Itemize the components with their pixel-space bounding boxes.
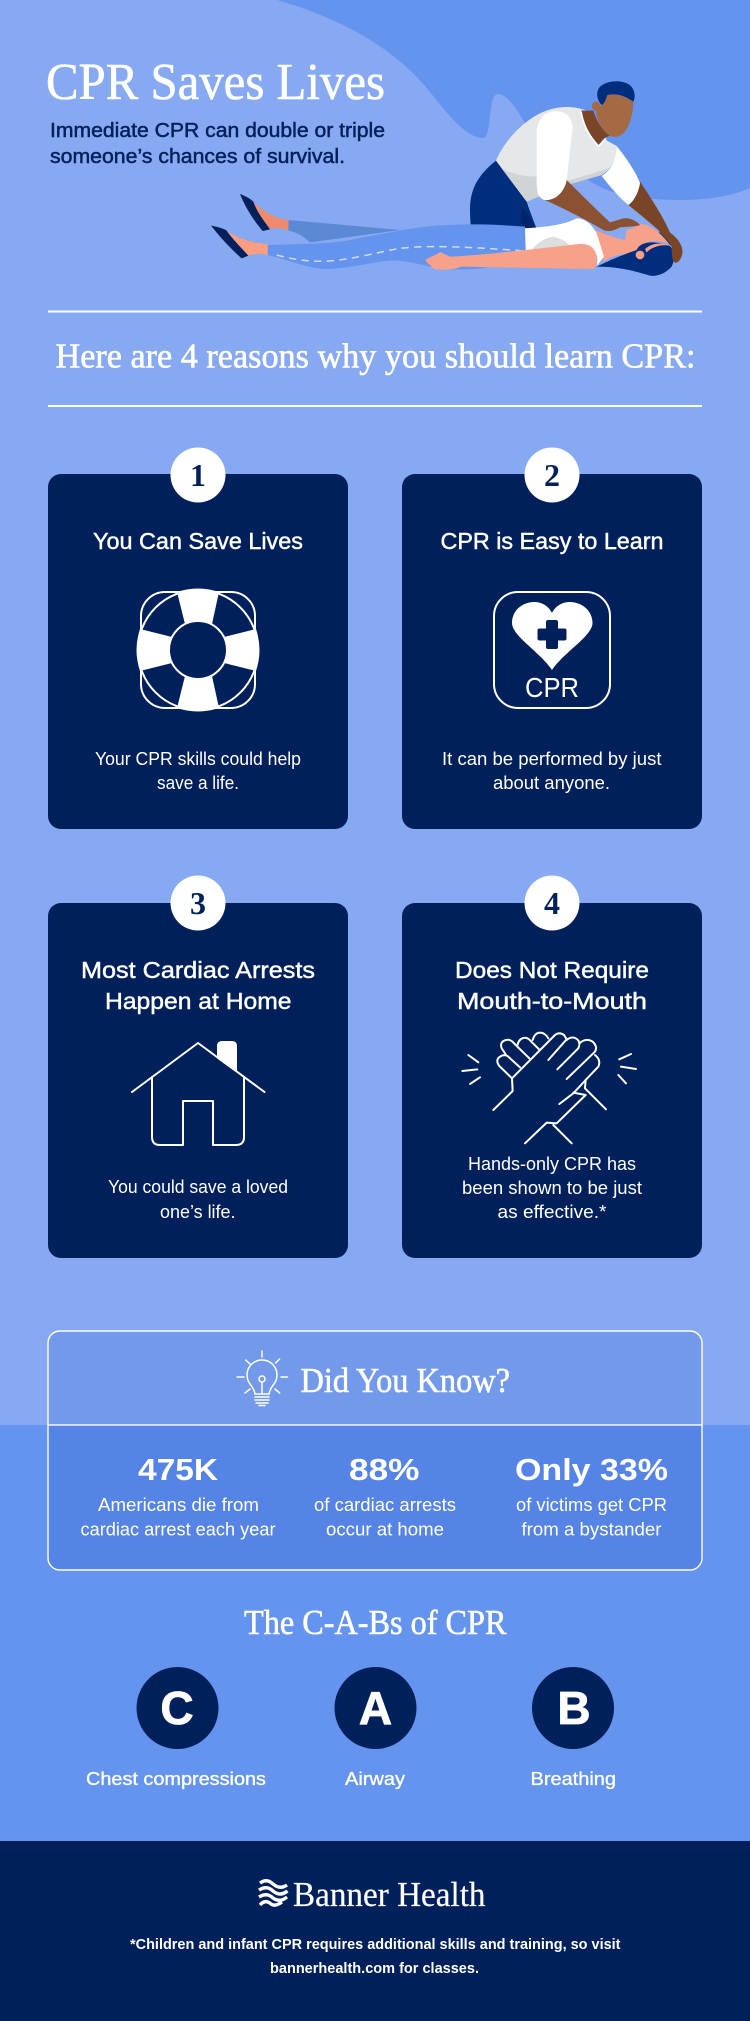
item: A [334,1667,416,1789]
number badge 1 [170,448,226,502]
stat: 88% [314,1452,456,1540]
stat: 475K [80,1452,276,1540]
body text: You could save a loved [108,1176,288,1197]
subtitle [50,120,385,168]
background: mid blue lower [0,1425,750,1841]
stat: 88%: of cardiac arrests [314,1494,456,1515]
item: B: Breathing [530,1769,616,1789]
title: CPR Saves Lives [46,54,385,111]
rescuer head [596,95,633,137]
icon: light bulb [237,1351,288,1406]
item: A: Airway [345,1769,405,1789]
top shadow [530,237,570,252]
icon: CPR heart [494,592,610,708]
panel: card 1 [48,448,348,829]
divider top [48,310,702,312]
stat: only 33%: from a bystander [522,1518,662,1540]
body text: save a life. [157,772,239,793]
logo waves [259,1881,288,1905]
stat: only 33%: of victims get CPR [516,1494,667,1515]
heading: C-A-Bs: The C-A-Bs of CPR [244,1603,507,1642]
footnote: *Children and infant CPR requires additional skills and training, so visit [130,1937,621,1953]
logo: Banner Health [259,1875,486,1914]
body text: been shown to be just [462,1177,642,1198]
number badge 1: 1 [190,457,206,493]
body text: about anyone. [493,772,610,793]
body text [442,748,662,793]
stat: 88%: 88% [349,1452,420,1487]
number badge 3: 3 [190,885,206,921]
patient legs [211,194,525,270]
patient hair [597,242,674,276]
patient forehead [645,243,671,252]
patient upper body, rescuer upper body [425,81,682,276]
body text: as effective.* [498,1201,606,1222]
divider bottom [48,405,702,407]
number badge 2 [524,448,580,502]
item: B [530,1667,616,1789]
patient hair top [658,232,674,247]
item: B: B [557,1682,591,1734]
number badge 4: 4 [544,885,560,921]
heading: Happen at Home [105,988,292,1014]
heading: Did You Know? [300,1361,510,1400]
item: A: A [359,1682,392,1734]
hero background blob [277,0,750,200]
panel: card 2 [402,448,702,829]
rescuer front arm [545,180,640,231]
heading: Mouth-to-Mouth [457,988,647,1014]
panel: card 3 [48,876,348,1258]
background: light blue upper [0,0,750,1425]
rescuer hair [597,81,635,105]
stat: only 33%: Only 33% [515,1452,668,1487]
heading: CPR is Easy to Learn [440,528,664,554]
item: C: C [160,1682,194,1734]
subtitle: someone’s chances of survival. [50,146,345,168]
stat: 475K: cardiac arrest each year [80,1518,276,1540]
number badge 2: 2 [544,457,560,493]
body text [108,1176,288,1222]
panel: card 4 [402,876,702,1258]
heading [81,957,315,1014]
icon: high-five hands [462,1033,636,1143]
body text: one’s life. [160,1201,236,1222]
rescuer shorts [470,161,537,229]
rescuer back sleeve [602,146,640,205]
stat: 475K: 475K [138,1452,219,1487]
heading [455,957,649,1014]
body text: It can be performed by just [442,748,662,769]
patient ear [636,251,644,259]
rescuer torso [496,107,617,202]
illustration: CPR rescuer and patient [211,81,682,276]
rescuer front sleeve [537,111,572,200]
icon: house [132,1042,264,1145]
footer [0,1841,750,2021]
stat: 475K: Americans die from [98,1494,259,1515]
subtitle: Immediate CPR can double or triple [50,120,385,142]
footnote [130,1937,621,1977]
item: C [86,1667,266,1789]
torso shadow [502,168,608,202]
rescuer back arm [628,182,682,263]
item: C: Chest compressions [86,1769,266,1789]
body text [462,1153,642,1222]
patient arm [425,244,597,270]
patient chest and face [595,224,670,262]
stat: only 33% [515,1452,668,1540]
icon: CPR heart: CPR [525,672,579,703]
rescuer neck [581,111,610,145]
stat: 88%: occur at home [326,1518,444,1540]
number badge 4 [524,876,580,930]
heading: Does Not Require [455,957,649,983]
number badge 3 [170,876,226,930]
logo wordmark: Banner Health [293,1875,486,1914]
body text [95,748,301,793]
icon: life ring [136,588,260,712]
heading: You Can Save Lives [93,528,303,554]
panel: did you know [48,1331,702,1570]
body text: Hands-only CPR has [468,1153,636,1174]
heading: Most Cardiac Arrests [81,957,315,983]
footnote: bannerhealth.com for classes. [270,1961,479,1977]
collar [581,111,606,146]
body text: Your CPR skills could help [95,748,301,769]
rescuer ear [592,101,600,111]
patient top [525,218,604,266]
section heading: Here are 4 reasons why you should learn CPR: [56,336,696,376]
